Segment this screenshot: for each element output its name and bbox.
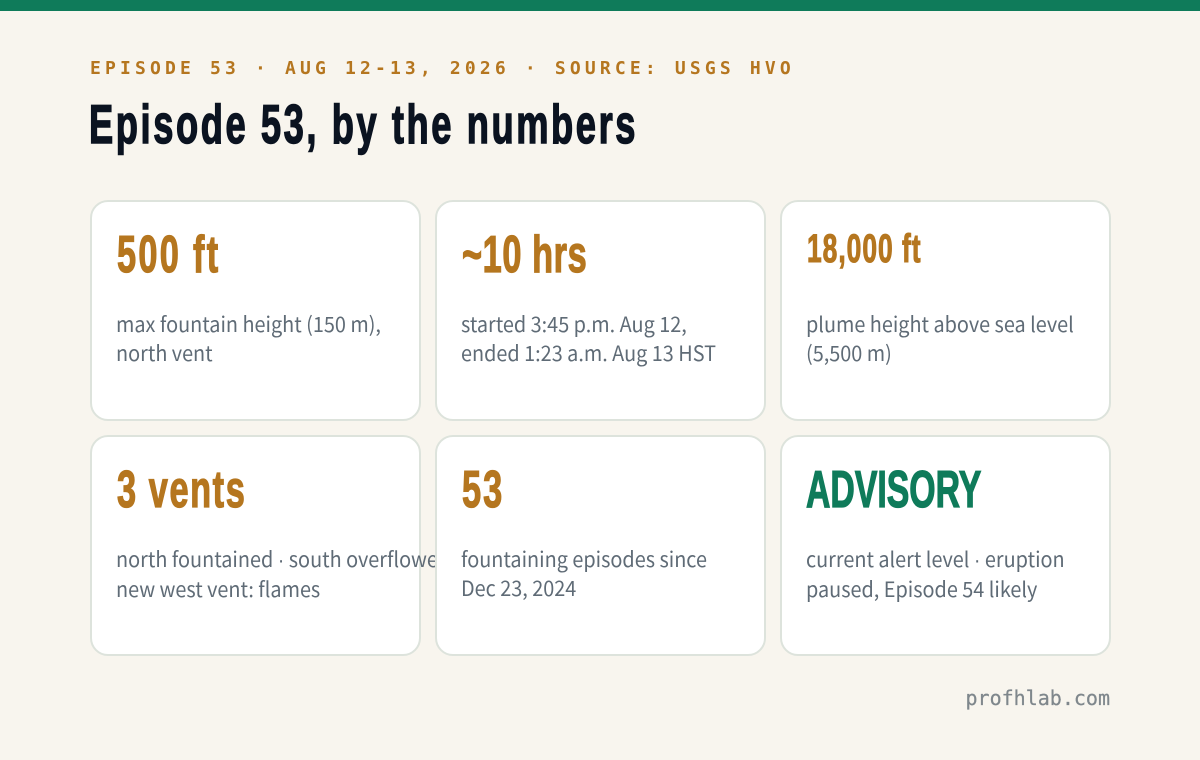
description: duration: started 3:45 p.m. Aug 12, [461,309,687,339]
panel: alert level [780,435,1111,656]
description: vents [116,544,456,604]
panel: duration [435,200,766,421]
value: 18,000 ft: 18,000 ft [807,227,922,271]
value: 53: 53 [462,461,504,519]
description: vents: new west vent: flames [116,574,320,604]
description: alert level: current alert level · eruption [806,544,1065,574]
panel: vents [90,435,421,656]
panel: fountain height [90,200,421,421]
value: ~10 hrs: ~10 hrs [462,226,587,284]
title: Episode 53, by the numbers [89,93,638,155]
description: fountain height: north vent [116,338,213,368]
description: plume height: plume height above sea level [806,309,1074,339]
value: 3 vents: 3 vents [117,461,246,519]
value: 500 ft: 500 ft [117,226,221,284]
eyebrow: EPISODE 53 · AUG 12-13, 2026 · SOURCE: USGS HVO [90,58,795,79]
panel: plume height [780,200,1111,421]
description: fountain height [116,309,381,368]
description: duration: ended 1:23 a.m. Aug 13 HST [461,338,716,368]
description: fountain height: max fountain height (150 m), [116,309,381,339]
panel: episode count [435,435,766,656]
description: episode count: fountaining episodes since [461,544,707,574]
description: alert level [806,544,1065,604]
description: plume height [806,309,1074,368]
description: vents: north fountained · south overflowed, [116,544,456,574]
description: plume height: (5,500 m) [806,338,892,368]
footer credit: profhlab.com [966,686,1110,710]
description: episode count: Dec 23, 2024 [461,573,576,603]
description: duration [461,309,716,368]
value: ADVISORY: ADVISORY [806,461,981,519]
top accent bar [0,0,1200,11]
description: alert level: paused, Episode 54 likely [806,574,1037,604]
description: episode count [461,544,707,603]
